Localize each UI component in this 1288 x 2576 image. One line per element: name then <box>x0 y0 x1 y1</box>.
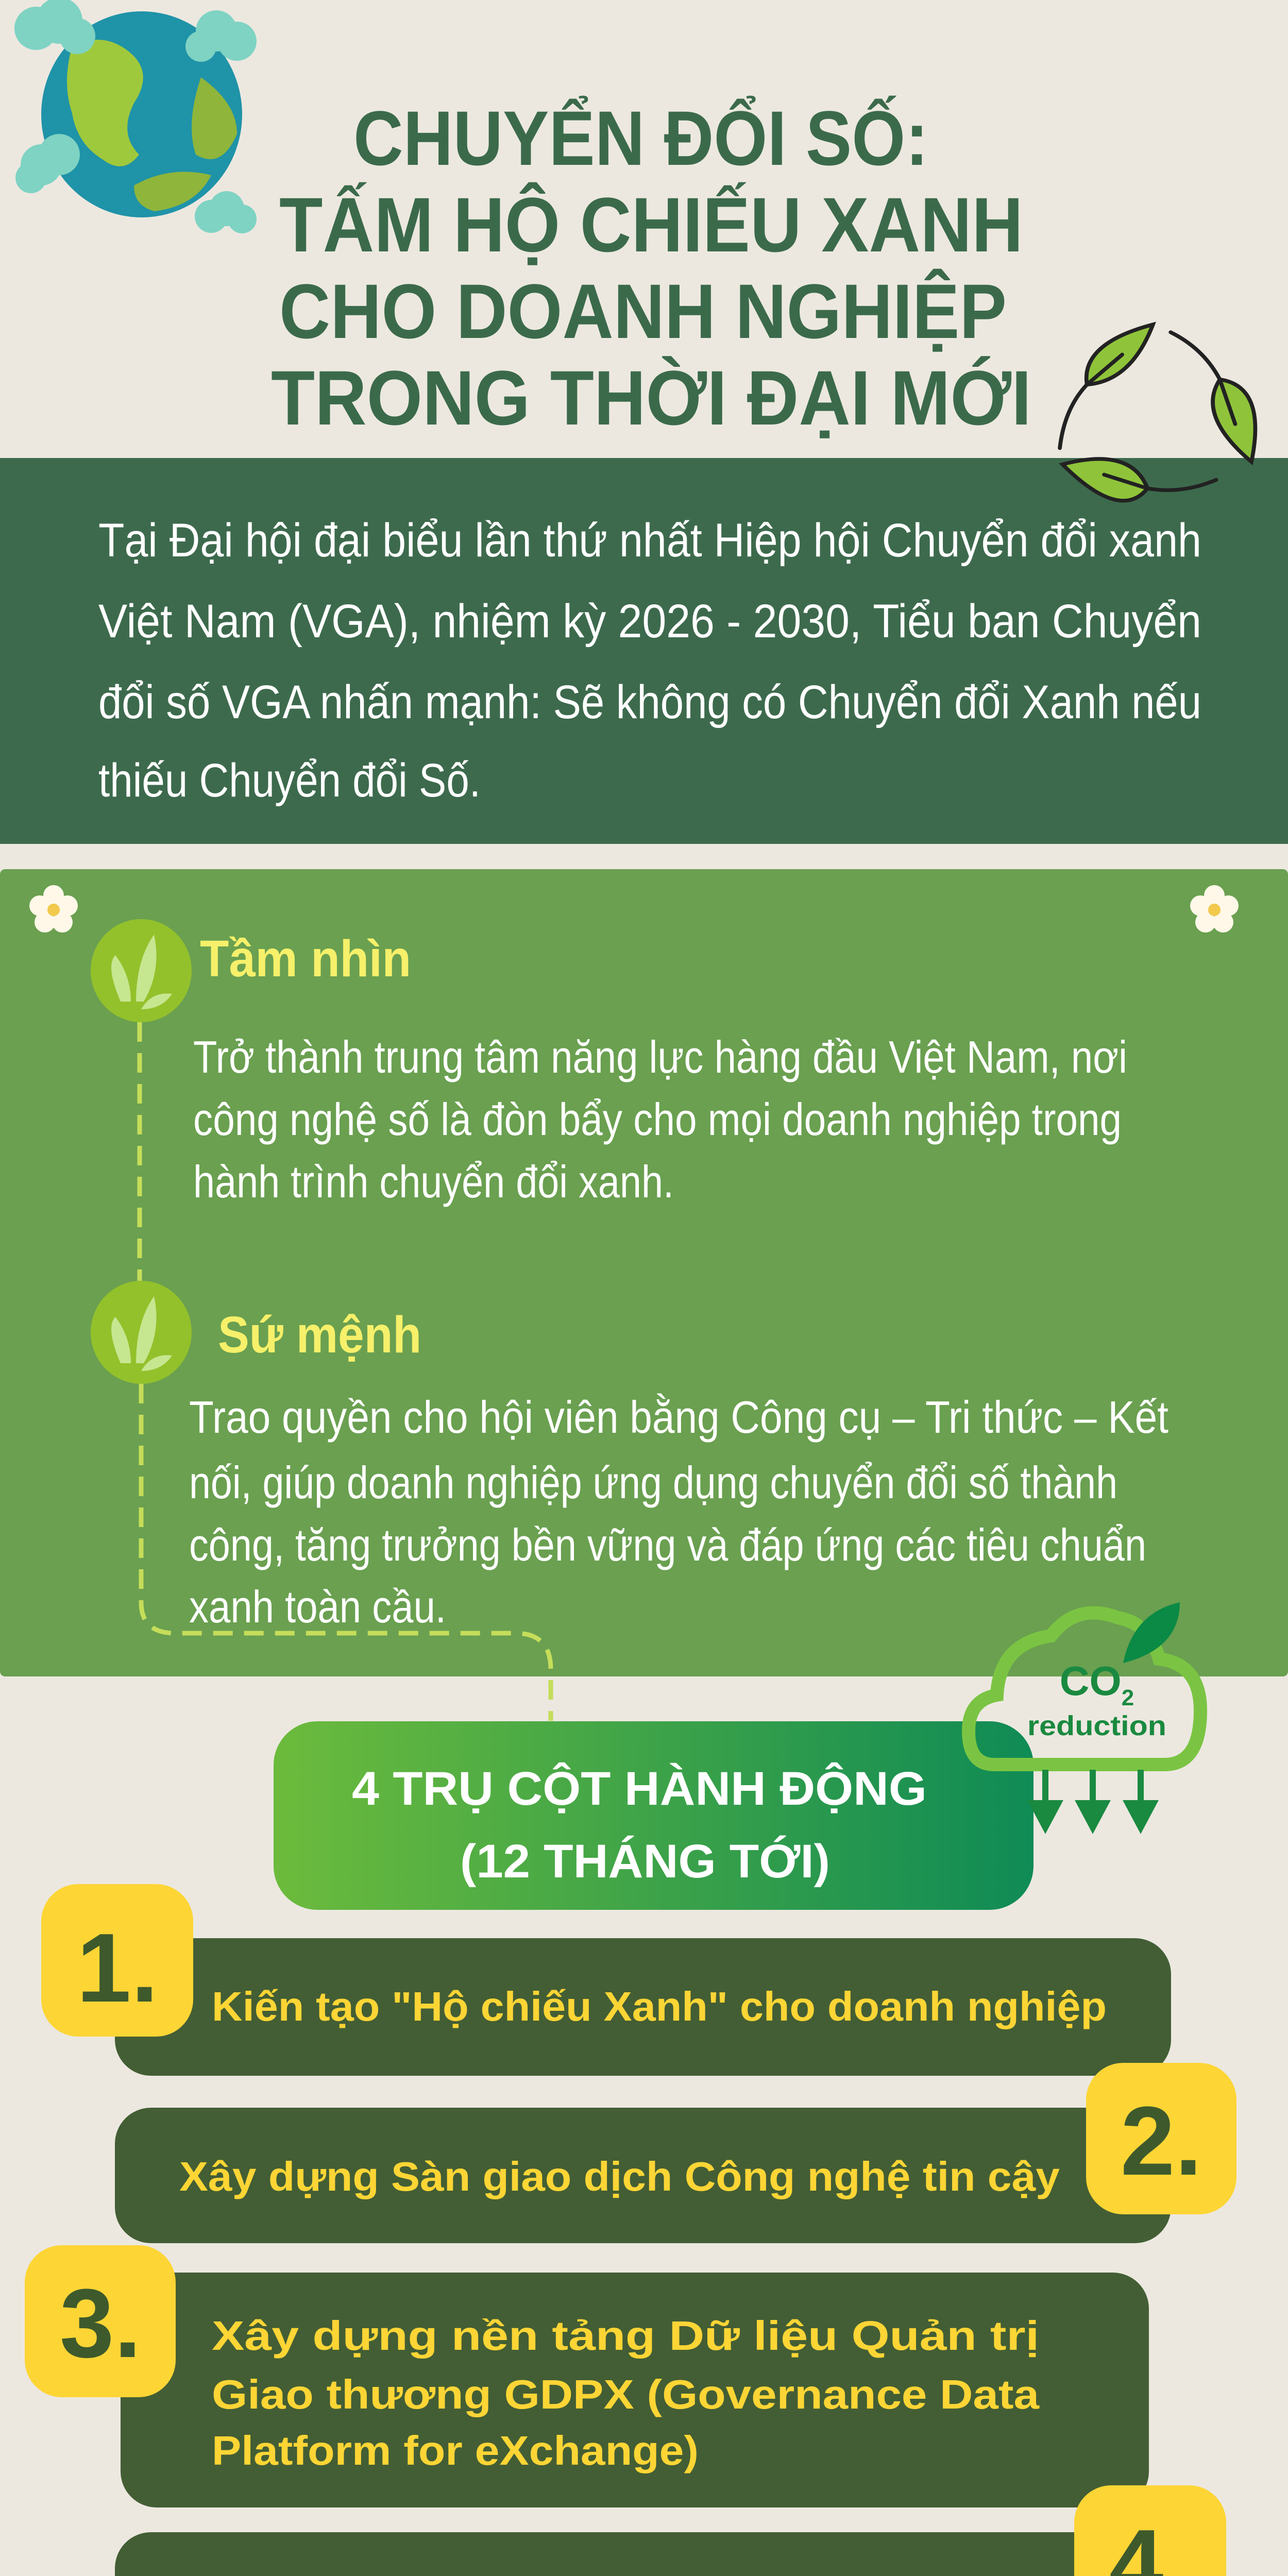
pillar 3: Xây dựng nền tảng Dữ liệu Quản trị <box>212 2313 1039 2359</box>
text: mission body: công, tăng trưởng bền vững và đáp ứng các tiêu chuẩn <box>189 1519 1146 1570</box>
heading box: 4 pillars: (12 THÁNG TỚI) <box>460 1835 830 1888</box>
heading box: 4 pillars <box>274 1721 1033 1910</box>
icon: sprout circle 1 <box>91 919 192 1022</box>
panel: vision and mission <box>0 869 1288 1721</box>
title: TẤM HỘ CHIẾU XANH <box>279 181 1023 268</box>
icon: sprout circle 2 <box>91 1281 192 1384</box>
title: CHO DOANH NGHIỆP <box>279 268 1007 354</box>
text: mission body: xanh toàn cầu. <box>189 1581 446 1632</box>
pillar 3: Platform for eXchange) <box>212 2428 699 2473</box>
icon: flower right <box>1190 885 1239 933</box>
heading: Tầm nhìn: Tầm nhìn <box>200 930 411 988</box>
icon: CO2 reduction cloud <box>969 1602 1200 1827</box>
pillar 3: Giao thương GDPX (Governance Data <box>212 2371 1040 2417</box>
pillar 3: 3. <box>60 2269 141 2378</box>
text: mission body: nối, giúp doanh nghiệp ứng dụng chuyển đổi số thành <box>189 1457 1117 1508</box>
pillar 2 <box>115 2063 1236 2243</box>
pillar 1: Kiến tạo "Hộ chiếu Xanh" cho doanh nghiệp <box>212 1984 1107 2029</box>
heading: Sứ mệnh: Sứ mệnh <box>218 1306 421 1364</box>
text: vision body: hành trình chuyển đổi xanh. <box>193 1156 674 1207</box>
title <box>271 95 1031 441</box>
text: mission body: Trao quyền cho hội viên bằng Công cụ – Tri thức – Kết <box>189 1392 1168 1443</box>
intro band: Việt Nam (VGA), nhiệm kỳ 2026 - 2030, Tiểu ban Chuyển <box>98 595 1201 648</box>
text: vision body <box>193 1031 1127 1207</box>
icon: CO2 reduction cloud: CO <box>1060 1658 1122 1704</box>
intro band: thiếu Chuyển đổi Số. <box>98 754 481 807</box>
heading box: 4 pillars: 4 TRỤ CỘT HÀNH ĐỘNG <box>352 1762 927 1815</box>
title: CHUYỂN ĐỔI SỐ: <box>353 95 928 181</box>
icon: flower left <box>29 885 78 933</box>
text: vision body: Trở thành trung tâm năng lực hàng đầu Việt Nam, nơi <box>193 1031 1127 1082</box>
text: mission body <box>189 1392 1168 1632</box>
intro band <box>0 458 1288 844</box>
title: TRONG THỜI ĐẠI MỚI <box>271 354 1031 441</box>
pillar 3 <box>25 2245 1149 2507</box>
pillar 4 <box>115 2485 1226 2576</box>
icon: CO2 reduction cloud: reduction <box>1027 1710 1166 1741</box>
dashed timeline <box>140 1022 551 1721</box>
icon: recycling leaves <box>1060 325 1255 501</box>
pillar 1 <box>41 1884 1171 2076</box>
icon: globe with clouds <box>14 0 257 233</box>
pillar 2: Xây dựng Sàn giao dịch Công nghệ tin cậy <box>179 2154 1060 2199</box>
pillar 2: 2. <box>1121 2087 1202 2196</box>
icon: CO2 reduction cloud: 2 <box>1122 1685 1134 1710</box>
pillar 1: 1. <box>77 1913 158 2023</box>
text: vision body: công nghệ số là đòn bẩy cho mọi doanh nghiệp trong <box>193 1094 1122 1145</box>
